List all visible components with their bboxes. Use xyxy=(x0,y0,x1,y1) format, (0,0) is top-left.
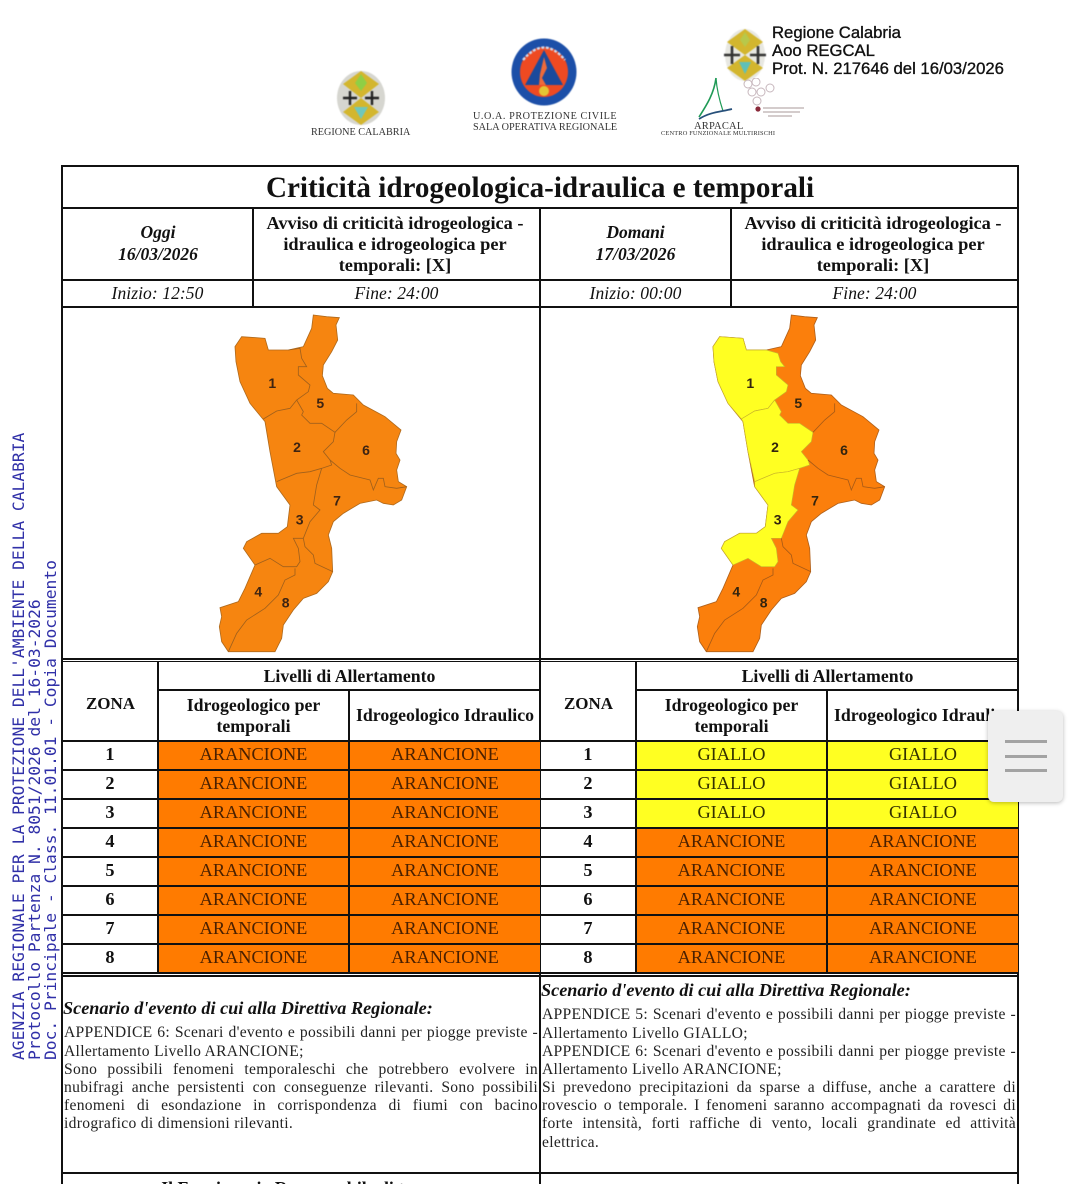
row zone 2: 2 xyxy=(105,773,115,793)
vertical protocol watermark: Doc. Principale - Class. 11.01.01 - Copia Documento xyxy=(41,560,60,1060)
row zone 5: 5 xyxy=(105,860,115,880)
row zone 2: GIALLO xyxy=(889,773,957,793)
row zone 1 xyxy=(63,740,540,769)
row zone 6: ARANCIONE xyxy=(869,889,977,909)
scenario heading: Scenario d'evento di cui alla Direttiva Regionale: xyxy=(541,980,911,1000)
logo caption line two: SALA OPERATIVA REGIONALE xyxy=(473,122,617,133)
logo caption: ARPACAL xyxy=(694,121,743,132)
vertical protocol watermark: AGENZIA REGIONALE PER LA PROTEZIONE DELL'AMBIENTE DELLA CALABRIA xyxy=(9,433,28,1060)
date: tomorrow xyxy=(596,222,676,264)
date: tomorrow: 17/03/2026 xyxy=(596,244,675,264)
row zone 7: 7 xyxy=(105,918,115,938)
scenario text: APPENDICE 6: Scenari d'evento e possibili danni per piogge previste - xyxy=(542,1043,1016,1060)
icon: Calabria coat of arms xyxy=(336,70,386,126)
icon: menu bars xyxy=(1005,740,1047,772)
row zone 3: 3 xyxy=(105,802,115,822)
start time: today: Inizio: 12:50 xyxy=(112,283,203,303)
scenario text: Allertamento Livello ARANCIONE; xyxy=(542,1061,782,1078)
row zone 1: GIALLO xyxy=(889,744,957,764)
column: thunderstorm hydrogeological: Idrogeologico per xyxy=(665,694,798,714)
logo: Protezione Civile xyxy=(473,38,617,133)
table header: levels xyxy=(635,662,1018,691)
row zone 7: ARANCIONE xyxy=(678,918,785,938)
map: tomorrow, zones 1-3 yellow: 8 xyxy=(760,595,768,611)
notice heading: today: idraulica e idrogeologica per xyxy=(283,234,507,254)
row zone 7: 7 xyxy=(583,918,593,938)
icon: Calabria coat of arms small xyxy=(723,28,767,82)
row zone 1 xyxy=(541,740,988,769)
end time: tomorrow: Fine: 24:00 xyxy=(832,283,916,303)
row zone 5 xyxy=(541,856,1018,885)
row zone 8: ARANCIONE xyxy=(200,947,307,967)
scenario text: idrografico di dimensioni rilevanti. xyxy=(64,1115,293,1132)
row zone 5 xyxy=(63,856,540,885)
row zone 7: ARANCIONE xyxy=(869,918,977,938)
row zone 3: ARANCIONE xyxy=(391,802,499,822)
row zone 5: 5 xyxy=(583,860,593,880)
map: today, all zones orange xyxy=(218,314,408,652)
map: tomorrow, zones 1-3 yellow: 5 xyxy=(794,395,802,411)
row zone 5: ARANCIONE xyxy=(391,860,499,880)
column: hydraulic: Idrogeologico Idraulico xyxy=(356,705,534,725)
notice heading: today: Avviso di criticità idrogeologica - xyxy=(266,212,524,232)
panel: bulletin frame xyxy=(61,165,1019,1184)
row zone 6 xyxy=(63,885,540,914)
column: thunderstorm hydrogeological: Idrogeologico per xyxy=(187,694,320,714)
map: tomorrow, zones 1-3 yellow: 6 xyxy=(840,442,848,458)
column: thunderstorm hydrogeological xyxy=(157,691,348,740)
map: today, all zones orange: 7 xyxy=(333,492,341,508)
row zone 2: ARANCIONE xyxy=(200,773,307,793)
row zone 7: ARANCIONE xyxy=(391,918,499,938)
row zone 4: 4 xyxy=(583,831,593,851)
map: tomorrow, zones 1-3 yellow: 7 xyxy=(811,492,819,508)
date: tomorrow: Domani xyxy=(606,222,665,242)
zone 2 yellow xyxy=(741,400,813,482)
scenario text: rovescio o temporale. I fenomeni saranno accompagnati da rovesci di xyxy=(542,1097,1016,1114)
row zone 3 xyxy=(541,798,1018,827)
row zone 3: GIALLO xyxy=(697,802,766,822)
row zone 6 xyxy=(541,885,1018,914)
row zone 2 xyxy=(541,769,988,798)
map: tomorrow, zones 1-3 yellow: 3 xyxy=(774,512,782,528)
row zone 5: ARANCIONE xyxy=(869,860,977,880)
row zone 7 xyxy=(541,914,1018,943)
floating menu button xyxy=(988,711,1063,802)
map: today, all zones orange: 5 xyxy=(316,395,324,411)
map: today, all zones orange: 2 xyxy=(293,439,301,455)
logo caption: REGIONE CALABRIA xyxy=(311,127,410,138)
row zone 2: 2 xyxy=(583,773,593,793)
map: tomorrow, zones 1-3 yellow: 1 xyxy=(746,375,754,391)
panel: scenario today xyxy=(63,998,538,1132)
logo: ARPACAL xyxy=(661,28,804,137)
protocol stamp: Regione Calabria xyxy=(772,23,901,42)
notice heading: today xyxy=(266,212,524,275)
date: today: Oggi xyxy=(140,222,175,242)
row zone 8: ARANCIONE xyxy=(678,947,785,967)
title: Criticità idrogeologica-idraulica e temporali xyxy=(266,172,814,204)
logo subcaption: CENTRO FUNZIONALE MULTIRISCHI xyxy=(661,130,775,137)
map: today, all zones orange: 4 xyxy=(254,583,262,599)
start time: tomorrow: Inizio: 00:00 xyxy=(590,283,681,303)
scenario text: APPENDICE 5: Scenari d'evento e possibili danni per piogge previste - xyxy=(542,1006,1016,1023)
protocol stamp: Prot. N. 217646 del 16/03/2026 xyxy=(772,59,1004,78)
zone 1 yellow xyxy=(713,337,788,419)
scenario heading: Scenario d'evento di cui alla Direttiva Regionale: xyxy=(63,998,433,1018)
scenario text: Sono possibili fenomeni temporaleschi che potrebbero evolvere in xyxy=(64,1061,538,1078)
scenario text: forte intensità, forti raffiche di vento, locali grandinate ed attività xyxy=(542,1115,1016,1132)
row zone 8: 8 xyxy=(583,947,593,967)
row zone 2: ARANCIONE xyxy=(391,773,499,793)
row zone 1: ARANCIONE xyxy=(391,744,499,764)
panel: alert table tomorrow xyxy=(540,661,1018,974)
notice heading: tomorrow: idraulica e idrogeologica per xyxy=(761,234,985,254)
end time: today: Fine: 24:00 xyxy=(354,283,438,303)
row zone 4: ARANCIONE xyxy=(200,831,307,851)
notice heading: tomorrow: temporali: [X] xyxy=(817,254,929,274)
row zone 1: 1 xyxy=(583,744,593,764)
row zone 8: 8 xyxy=(105,947,115,967)
logo: Regione Calabria xyxy=(311,70,410,138)
row zone 3 xyxy=(63,798,540,827)
panel: alert table today xyxy=(62,661,540,974)
table header: levels: Livelli di Allertamento xyxy=(264,666,435,686)
row zone 2: GIALLO xyxy=(697,773,766,793)
icon: molecule chain xyxy=(744,78,804,116)
row zone 8 xyxy=(541,943,1018,972)
row zone 4 xyxy=(63,827,540,856)
map: tomorrow, zones 1-3 yellow xyxy=(696,314,886,652)
row zone 4: ARANCIONE xyxy=(869,831,977,851)
scenario text xyxy=(64,1024,538,1132)
scenario text xyxy=(542,1006,1016,1151)
row zone 6: ARANCIONE xyxy=(200,889,307,909)
map: tomorrow, zones 1-3 yellow: 2 xyxy=(771,439,779,455)
table header: zona: ZONA xyxy=(86,694,135,712)
map: today, all zones orange: 1 xyxy=(268,375,276,391)
row zone 4: ARANCIONE xyxy=(678,831,785,851)
zone 3 yellow xyxy=(721,468,800,567)
notice heading: tomorrow xyxy=(744,212,1002,275)
row zone 5: ARANCIONE xyxy=(200,860,307,880)
row zone 4 xyxy=(541,827,1018,856)
row zone 8: ARANCIONE xyxy=(391,947,499,967)
row zone 5: ARANCIONE xyxy=(678,860,785,880)
notice heading: tomorrow: Avviso di criticità idrogeologica - xyxy=(744,212,1002,232)
icon: civil protection emblem xyxy=(510,38,578,106)
table header: levels: Livelli di Allertamento xyxy=(742,666,913,686)
notice heading: today: temporali: [X] xyxy=(339,254,451,274)
map: today, all zones orange: 8 xyxy=(282,595,290,611)
row zone 3: GIALLO xyxy=(889,802,957,822)
table header: zona: ZONA xyxy=(564,694,613,712)
logo caption: U.O.A. PROTEZIONE CIVILE xyxy=(473,111,617,122)
vertical protocol watermark: Protocollo Partenza N. 8051/2026 del 16-03-2026 xyxy=(25,599,44,1060)
row zone 6: 6 xyxy=(105,889,115,909)
scenario text: Si prevedono precipitazioni da sparse a diffuse, anche a carattere di xyxy=(542,1079,1016,1096)
scenario text: Allertamento Livello GIALLO; xyxy=(542,1025,748,1042)
protocol stamp xyxy=(772,23,1004,78)
row zone 7 xyxy=(63,914,540,943)
row zone 8 xyxy=(63,943,540,972)
row zone 4: ARANCIONE xyxy=(391,831,499,851)
row zone 3: ARANCIONE xyxy=(200,802,307,822)
row zone 2 xyxy=(63,769,540,798)
scenario text: APPENDICE 6: Scenari d'evento e possibili danni per piogge previste - xyxy=(64,1024,538,1041)
column: hydraulic xyxy=(348,691,540,740)
map: today, all zones orange: 3 xyxy=(296,512,304,528)
map: today, all zones orange: 6 xyxy=(362,442,370,458)
protocol stamp: Aoo REGCAL xyxy=(772,41,875,60)
date: today: 16/03/2026 xyxy=(118,244,198,264)
date: today xyxy=(118,222,198,264)
row zone 6: ARANCIONE xyxy=(391,889,499,909)
column: hydraulic xyxy=(826,691,1018,740)
panel: scenario tomorrow xyxy=(541,980,1016,1151)
row zone 3: 3 xyxy=(583,802,593,822)
column: hydraulic: Idrogeologico Idraulico xyxy=(834,705,1012,725)
column: thunderstorm hydrogeological: temporali xyxy=(694,716,769,736)
icon: ARPACAL sail swoosh xyxy=(698,78,732,120)
map: tomorrow, zones 1-3 yellow: 4 xyxy=(732,583,740,599)
table header: levels xyxy=(157,662,540,691)
row zone 4: 4 xyxy=(105,831,115,851)
row zone 6: ARANCIONE xyxy=(678,889,785,909)
row zone 1: ARANCIONE xyxy=(200,744,307,764)
row zone 1: 1 xyxy=(105,744,115,764)
scenario text: Allertamento Livello ARANCIONE; xyxy=(64,1043,304,1060)
column: thunderstorm hydrogeological xyxy=(635,691,826,740)
column: thunderstorm hydrogeological: temporali xyxy=(216,716,291,736)
scenario text: elettrica. xyxy=(542,1134,599,1151)
scenario text: fenomeni di esondazione in corrispondenza di fiumi con bacino xyxy=(64,1097,538,1114)
row zone 7: ARANCIONE xyxy=(200,918,307,938)
row zone 8: ARANCIONE xyxy=(869,947,977,967)
row zone 6: 6 xyxy=(583,889,593,909)
vertical protocol watermark xyxy=(9,433,60,1060)
row zone 1: GIALLO xyxy=(697,744,766,764)
scenario text: nubifragi anche persistenti con conseguenze rilevanti. Sono possibili xyxy=(64,1079,538,1096)
